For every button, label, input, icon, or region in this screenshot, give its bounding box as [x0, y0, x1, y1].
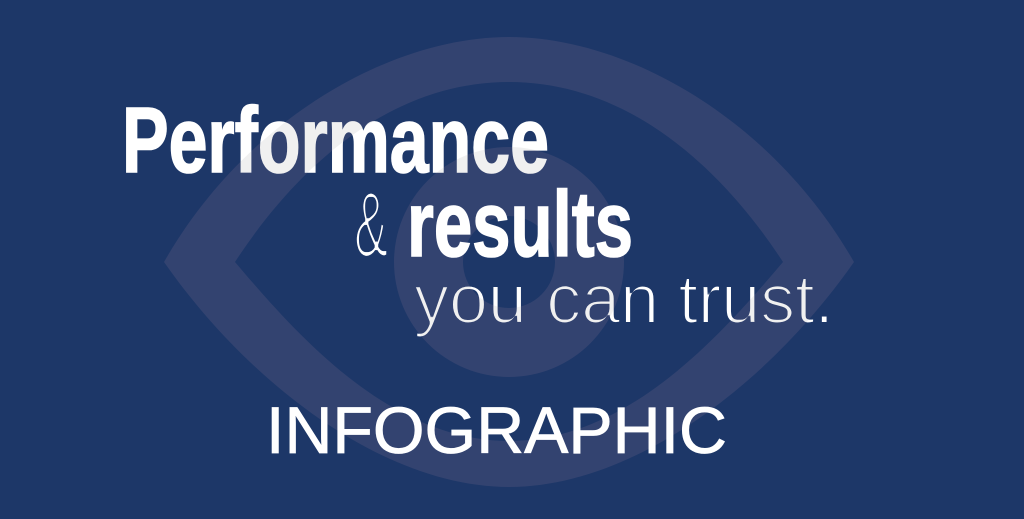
subtitle: INFOGRAPHIC — [266, 393, 727, 467]
headline line 1: Performance — [122, 88, 549, 192]
tint: eye outline — [164, 37, 854, 487]
eye tint over text — [164, 37, 854, 487]
ampersand: & — [354, 174, 388, 276]
eye outline — [164, 37, 854, 487]
eye iris — [394, 147, 624, 377]
tint: eye iris — [394, 147, 624, 377]
icon: eye watermark — [164, 37, 854, 487]
headline line 2: results — [407, 172, 633, 276]
headline line 3: you can trust. — [414, 260, 834, 338]
headline lines under the eye tint — [122, 88, 834, 338]
